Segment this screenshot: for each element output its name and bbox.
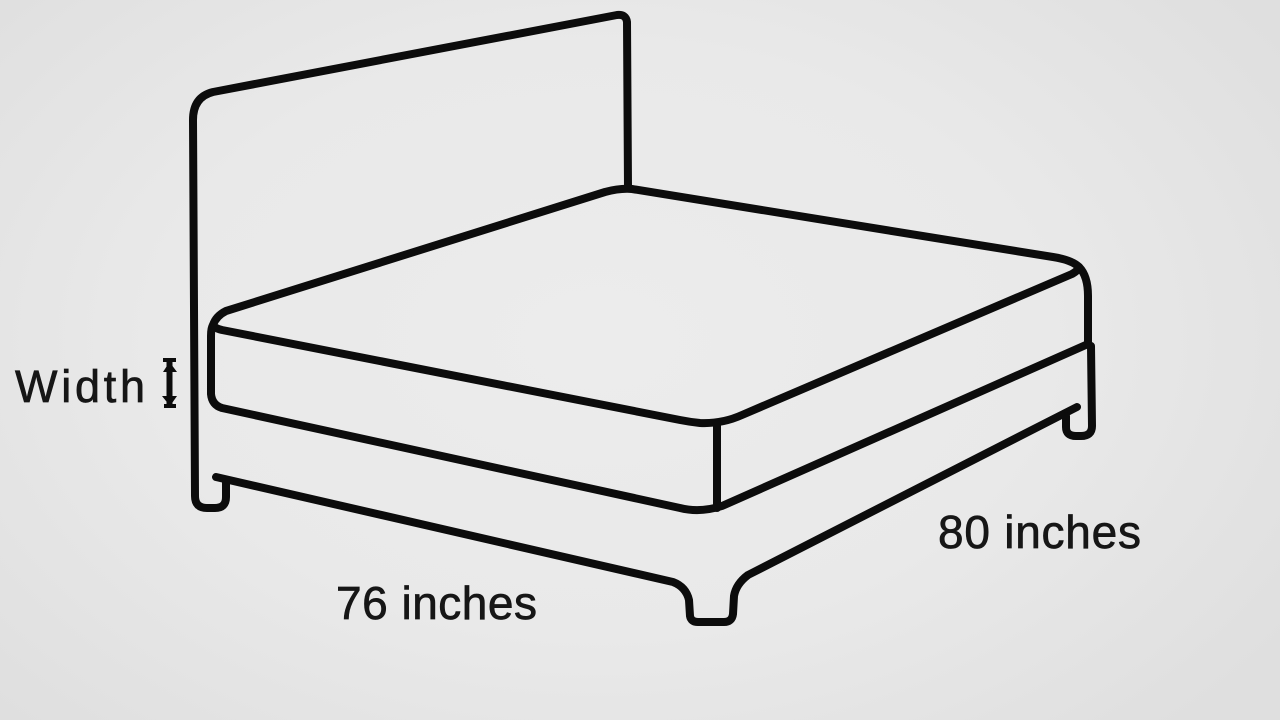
mattress front edge: [713, 424, 721, 508]
mattress right corner: [1079, 267, 1088, 344]
bed line drawing: [193, 15, 1092, 622]
label: length: 76 inches: [336, 577, 537, 629]
icon: width arrow: [162, 358, 177, 408]
mattress side: [211, 325, 1088, 510]
label: width: Width: [15, 361, 145, 412]
right leg: [1066, 346, 1092, 436]
mattress top: [213, 189, 1079, 423]
bed frame: [216, 407, 1077, 622]
label: depth: 80 inches: [938, 506, 1141, 558]
headboard: [193, 15, 628, 508]
